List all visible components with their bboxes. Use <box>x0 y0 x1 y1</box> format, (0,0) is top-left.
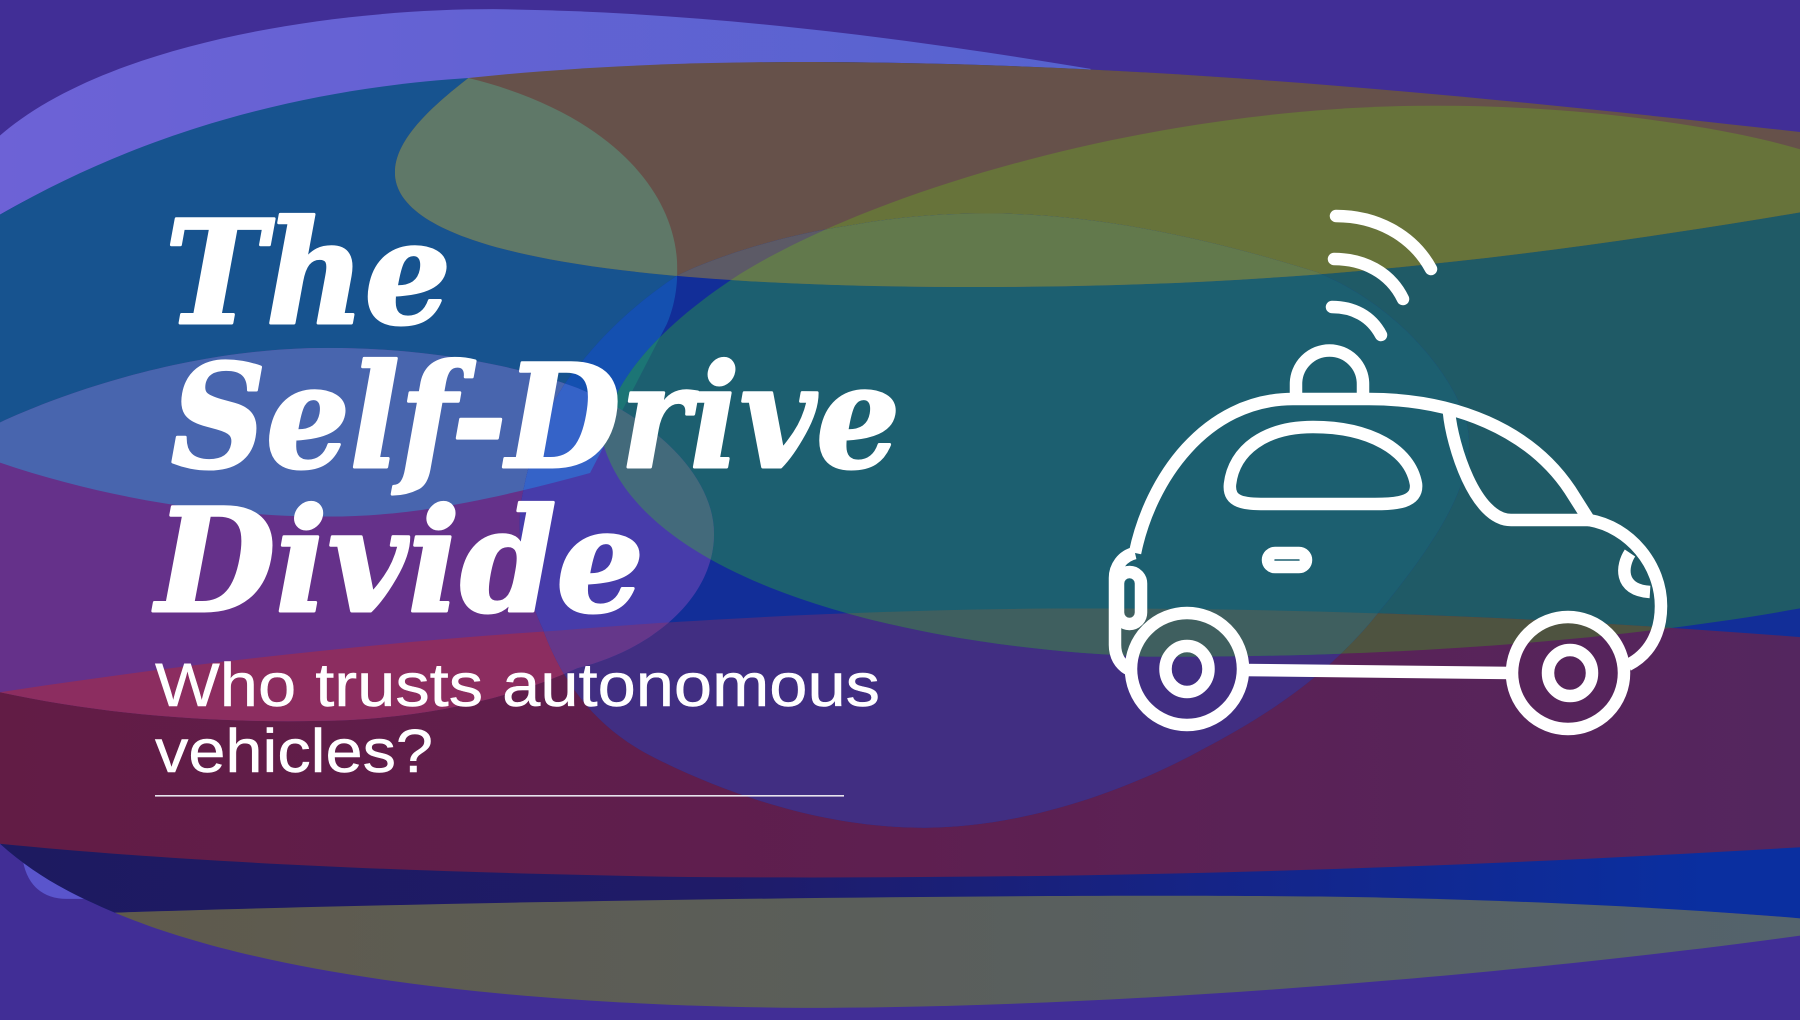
subtitle: Who trusts autonomous vehicles?: vehicles? <box>155 717 433 785</box>
title: The Self-Drive Divide <box>152 189 900 645</box>
icon: headlight <box>1624 553 1650 592</box>
shape: teal leaf <box>1322 212 1800 628</box>
shape: navy to blue lower strip <box>0 844 1800 918</box>
shape: large central translucent blob <box>520 214 1469 828</box>
shape: maroon band <box>0 613 1800 878</box>
icon: door handle <box>1268 553 1306 567</box>
icon: windshield <box>1449 412 1589 520</box>
subtitle underline rule <box>155 795 844 797</box>
icon: front wheel <box>1512 617 1624 729</box>
subtitle: Who trusts autonomous vehicles?: Who trusts autonomous <box>155 651 880 719</box>
icon: car underside <box>1244 670 1511 673</box>
shape: periwinkle top-left wave <box>0 9 1091 230</box>
icon: self-driving car with signal waves <box>1115 216 1661 729</box>
icon: signal arcs <box>1332 216 1431 335</box>
title: The Self-Drive Divide: The <box>165 189 451 357</box>
subtitle: Who trusts autonomous vehicles? <box>155 651 880 785</box>
icon: car body outline <box>1135 399 1661 665</box>
title: The Self-Drive Divide: Divide <box>152 477 644 645</box>
shape: left blue area <box>0 78 676 422</box>
icon: side window <box>1230 427 1416 504</box>
icon: tail light <box>1118 572 1141 624</box>
shape: brown top band <box>395 62 1800 276</box>
icon: rear bumper <box>1115 553 1135 669</box>
shape: periwinkle lower-left sliver <box>23 849 126 899</box>
title: The Self-Drive Divide: Self-Drive <box>171 333 900 501</box>
icon: rear wheel <box>1131 613 1243 725</box>
shape: olive bottom band <box>115 896 1800 1008</box>
shape: light lens left <box>0 348 565 722</box>
icon: roof sensor dome <box>1296 350 1363 396</box>
